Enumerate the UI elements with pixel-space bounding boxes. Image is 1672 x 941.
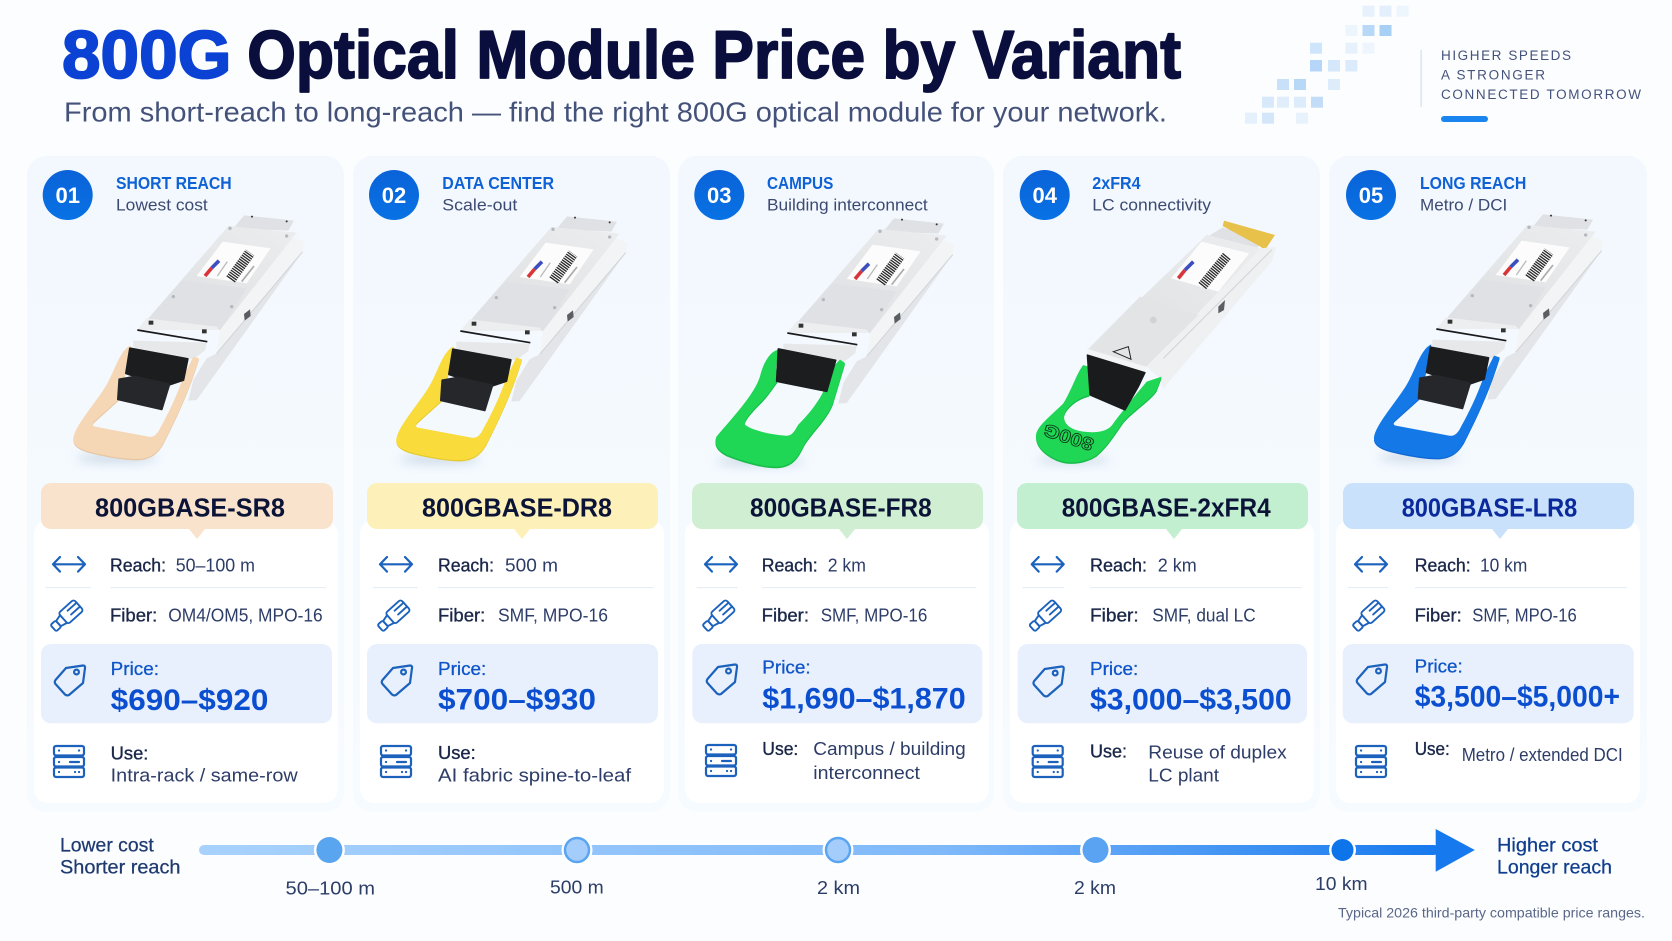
reach row — [53, 556, 255, 576]
number badge — [43, 170, 93, 220]
timeline distance labels: 10 km — [1315, 874, 1368, 894]
price box: Price: — [1090, 659, 1138, 679]
reach row: 2 km — [828, 556, 866, 576]
card heading: Lowest cost — [116, 196, 208, 215]
timeline distance labels: 2 km — [1074, 878, 1116, 898]
use row: Use: — [1415, 739, 1450, 759]
price box — [367, 644, 658, 723]
price box — [1018, 644, 1307, 723]
decorative pixel grid — [1245, 6, 1409, 124]
inner white panel — [685, 520, 989, 803]
card heading: DATA CENTER — [442, 173, 554, 193]
reach row: 50–100 m — [176, 556, 255, 576]
inner white panel — [1336, 520, 1640, 803]
number badge: 02 — [382, 183, 406, 208]
footnote: Typical 2026 third-party compatible price ranges. — [1338, 904, 1645, 920]
reach row: 2 km — [1158, 556, 1197, 576]
variant name pill: 800GBASE-DR8 — [422, 495, 612, 523]
price box: Price: — [111, 659, 159, 679]
price box: $1,690–$1,870 — [762, 682, 966, 715]
card background — [27, 156, 344, 812]
subtitle: From short-reach to long-reach — find the right 800G optical module for your network. — [64, 96, 1167, 128]
timeline left label — [60, 836, 180, 878]
node 2 km — [822, 834, 854, 866]
reach row: Reach: — [1415, 556, 1471, 576]
reach row: 500 m — [505, 556, 558, 576]
price box — [692, 644, 982, 723]
tagline: HIGHER SPEEDS — [1441, 48, 1571, 63]
fiber row: OM4/OM5, MPO-16 — [168, 606, 323, 626]
title: 800G — [62, 17, 232, 93]
inner white panel — [360, 520, 664, 803]
card background — [1003, 156, 1320, 812]
variant name pill — [1017, 483, 1308, 539]
number badge: 05 — [1359, 183, 1383, 208]
fiber row — [1027, 599, 1256, 633]
use row: interconnect — [813, 763, 920, 783]
reach row: Reach: — [1090, 556, 1147, 576]
card heading: CAMPUS — [767, 173, 833, 193]
timeline right label: Longer reach — [1497, 857, 1612, 878]
card background — [678, 156, 994, 812]
reach row: Reach: — [762, 556, 818, 576]
panel: card 3 campus — [678, 156, 994, 812]
variant name pill: 800GBASE-FR8 — [750, 495, 932, 523]
fiber row: SMF, dual LC — [1152, 606, 1256, 626]
inner white panel — [1010, 520, 1314, 803]
timeline left label: Shorter reach — [60, 857, 180, 878]
variant name pill: 800GBASE-LR8 — [1402, 495, 1577, 523]
use row — [54, 743, 299, 786]
variant name pill — [692, 483, 983, 539]
price box — [1343, 644, 1634, 723]
card heading: LC connectivity — [1092, 196, 1212, 215]
price box: Price: — [438, 659, 486, 679]
price box: $690–$920 — [111, 684, 268, 717]
reach row — [380, 556, 558, 576]
price box: $3,000–$3,500 — [1090, 684, 1292, 716]
panel: card 4 2xFR4 — [1003, 156, 1320, 812]
timeline distance labels — [286, 874, 1368, 898]
variant name pill: 800GBASE-2xFR4 — [1062, 495, 1271, 523]
card heading: 2xFR4 — [1092, 173, 1141, 193]
number badge — [694, 170, 744, 220]
variant name pill: 800GBASE-SR8 — [95, 495, 285, 523]
use row: Intra-rack / same-row — [111, 766, 299, 786]
panel: card 1 short reach — [27, 156, 344, 812]
use row: Use: — [762, 739, 798, 759]
number badge — [1346, 170, 1396, 220]
use row: Use: — [111, 743, 148, 763]
reach row: 10 km — [1480, 556, 1527, 576]
reach row: Reach: — [110, 556, 166, 576]
module image: green pull tab — [715, 218, 954, 468]
card heading: LONG REACH — [1420, 173, 1526, 193]
fiber row: Fiber: — [762, 606, 809, 626]
card heading — [1092, 173, 1212, 215]
inner white panel — [34, 520, 338, 803]
node 500 m — [562, 834, 592, 866]
tagline — [1420, 48, 1641, 122]
price box: Price: — [762, 658, 811, 678]
module image: blue pull tab — [1374, 214, 1603, 463]
use row: AI fabric spine-to-leaf — [438, 766, 632, 786]
title: Optical Module Price by Variant — [247, 17, 1181, 93]
fiber row — [700, 599, 927, 633]
use row: LC plant — [1148, 766, 1219, 786]
fiber row: Fiber: — [438, 606, 485, 626]
module image: yellow pull tab — [396, 216, 627, 465]
card background — [353, 156, 670, 812]
card heading: Metro / DCI — [1420, 196, 1507, 215]
card background — [1329, 156, 1647, 812]
use row — [706, 739, 966, 783]
number badge — [1020, 170, 1070, 220]
use row — [1033, 741, 1287, 786]
fiber row: SMF, MPO-16 — [821, 606, 927, 626]
use row: Campus / building — [813, 739, 966, 759]
reach row: Reach: — [438, 556, 494, 576]
timeline arrow — [199, 829, 1475, 872]
fiber row: Fiber: — [110, 606, 157, 626]
variant name pill — [367, 483, 658, 539]
node 50-100 m — [314, 834, 345, 866]
card heading — [1420, 173, 1526, 215]
card heading — [442, 173, 554, 215]
fiber row: Fiber: — [1090, 606, 1139, 626]
node 2 km second — [1080, 834, 1111, 866]
fiber row — [1350, 599, 1577, 633]
fiber row: SMF, MPO-16 — [498, 606, 608, 626]
module image: peach pull tab — [73, 215, 304, 464]
use row: Use: — [438, 743, 476, 763]
timeline left label: Lower cost — [60, 836, 154, 857]
fiber row — [375, 599, 608, 633]
number badge: 03 — [707, 183, 732, 208]
timeline right label — [1497, 836, 1612, 878]
number badge — [369, 170, 419, 220]
fiber row — [48, 599, 323, 633]
use row — [1356, 739, 1623, 777]
number badge: 04 — [1032, 183, 1058, 208]
fiber row: SMF, MPO-16 — [1472, 606, 1577, 626]
use row: Reuse of duplex — [1148, 742, 1287, 762]
card heading: Scale-out — [442, 196, 518, 215]
timeline right label: Higher cost — [1497, 836, 1599, 857]
card heading: SHORT REACH — [116, 173, 232, 193]
card heading: Building interconnect — [767, 196, 928, 215]
number badge: 01 — [55, 183, 80, 208]
node 10 km — [1329, 836, 1356, 864]
module image: green LC module — [1036, 221, 1276, 465]
tagline: A STRONGER — [1441, 67, 1545, 82]
module image: green LC module: 800G — [1041, 420, 1096, 455]
use row: Metro / extended DCI — [1462, 745, 1623, 765]
tagline: CONNECTED TOMORROW — [1441, 87, 1641, 102]
reach row — [705, 556, 866, 576]
card heading — [767, 173, 928, 215]
price box: Price: — [1415, 656, 1463, 676]
fiber row: Fiber: — [1415, 606, 1462, 626]
price box: $700–$930 — [438, 684, 596, 716]
reach row — [1355, 556, 1527, 576]
panel: card 5 long reach — [1329, 156, 1647, 812]
price box — [41, 644, 332, 723]
timeline distance labels: 50–100 m — [286, 878, 375, 898]
reach row — [1032, 556, 1197, 576]
price box: $3,500–$5,000+ — [1415, 681, 1620, 714]
timeline distance labels: 500 m — [550, 877, 604, 897]
use row — [381, 743, 632, 786]
card heading — [116, 173, 232, 215]
variant name pill — [1343, 483, 1634, 539]
timeline distance labels: 2 km — [817, 878, 860, 898]
variant name pill — [41, 483, 333, 539]
use row: Use: — [1090, 741, 1127, 761]
panel: card 2 data center — [353, 156, 670, 812]
